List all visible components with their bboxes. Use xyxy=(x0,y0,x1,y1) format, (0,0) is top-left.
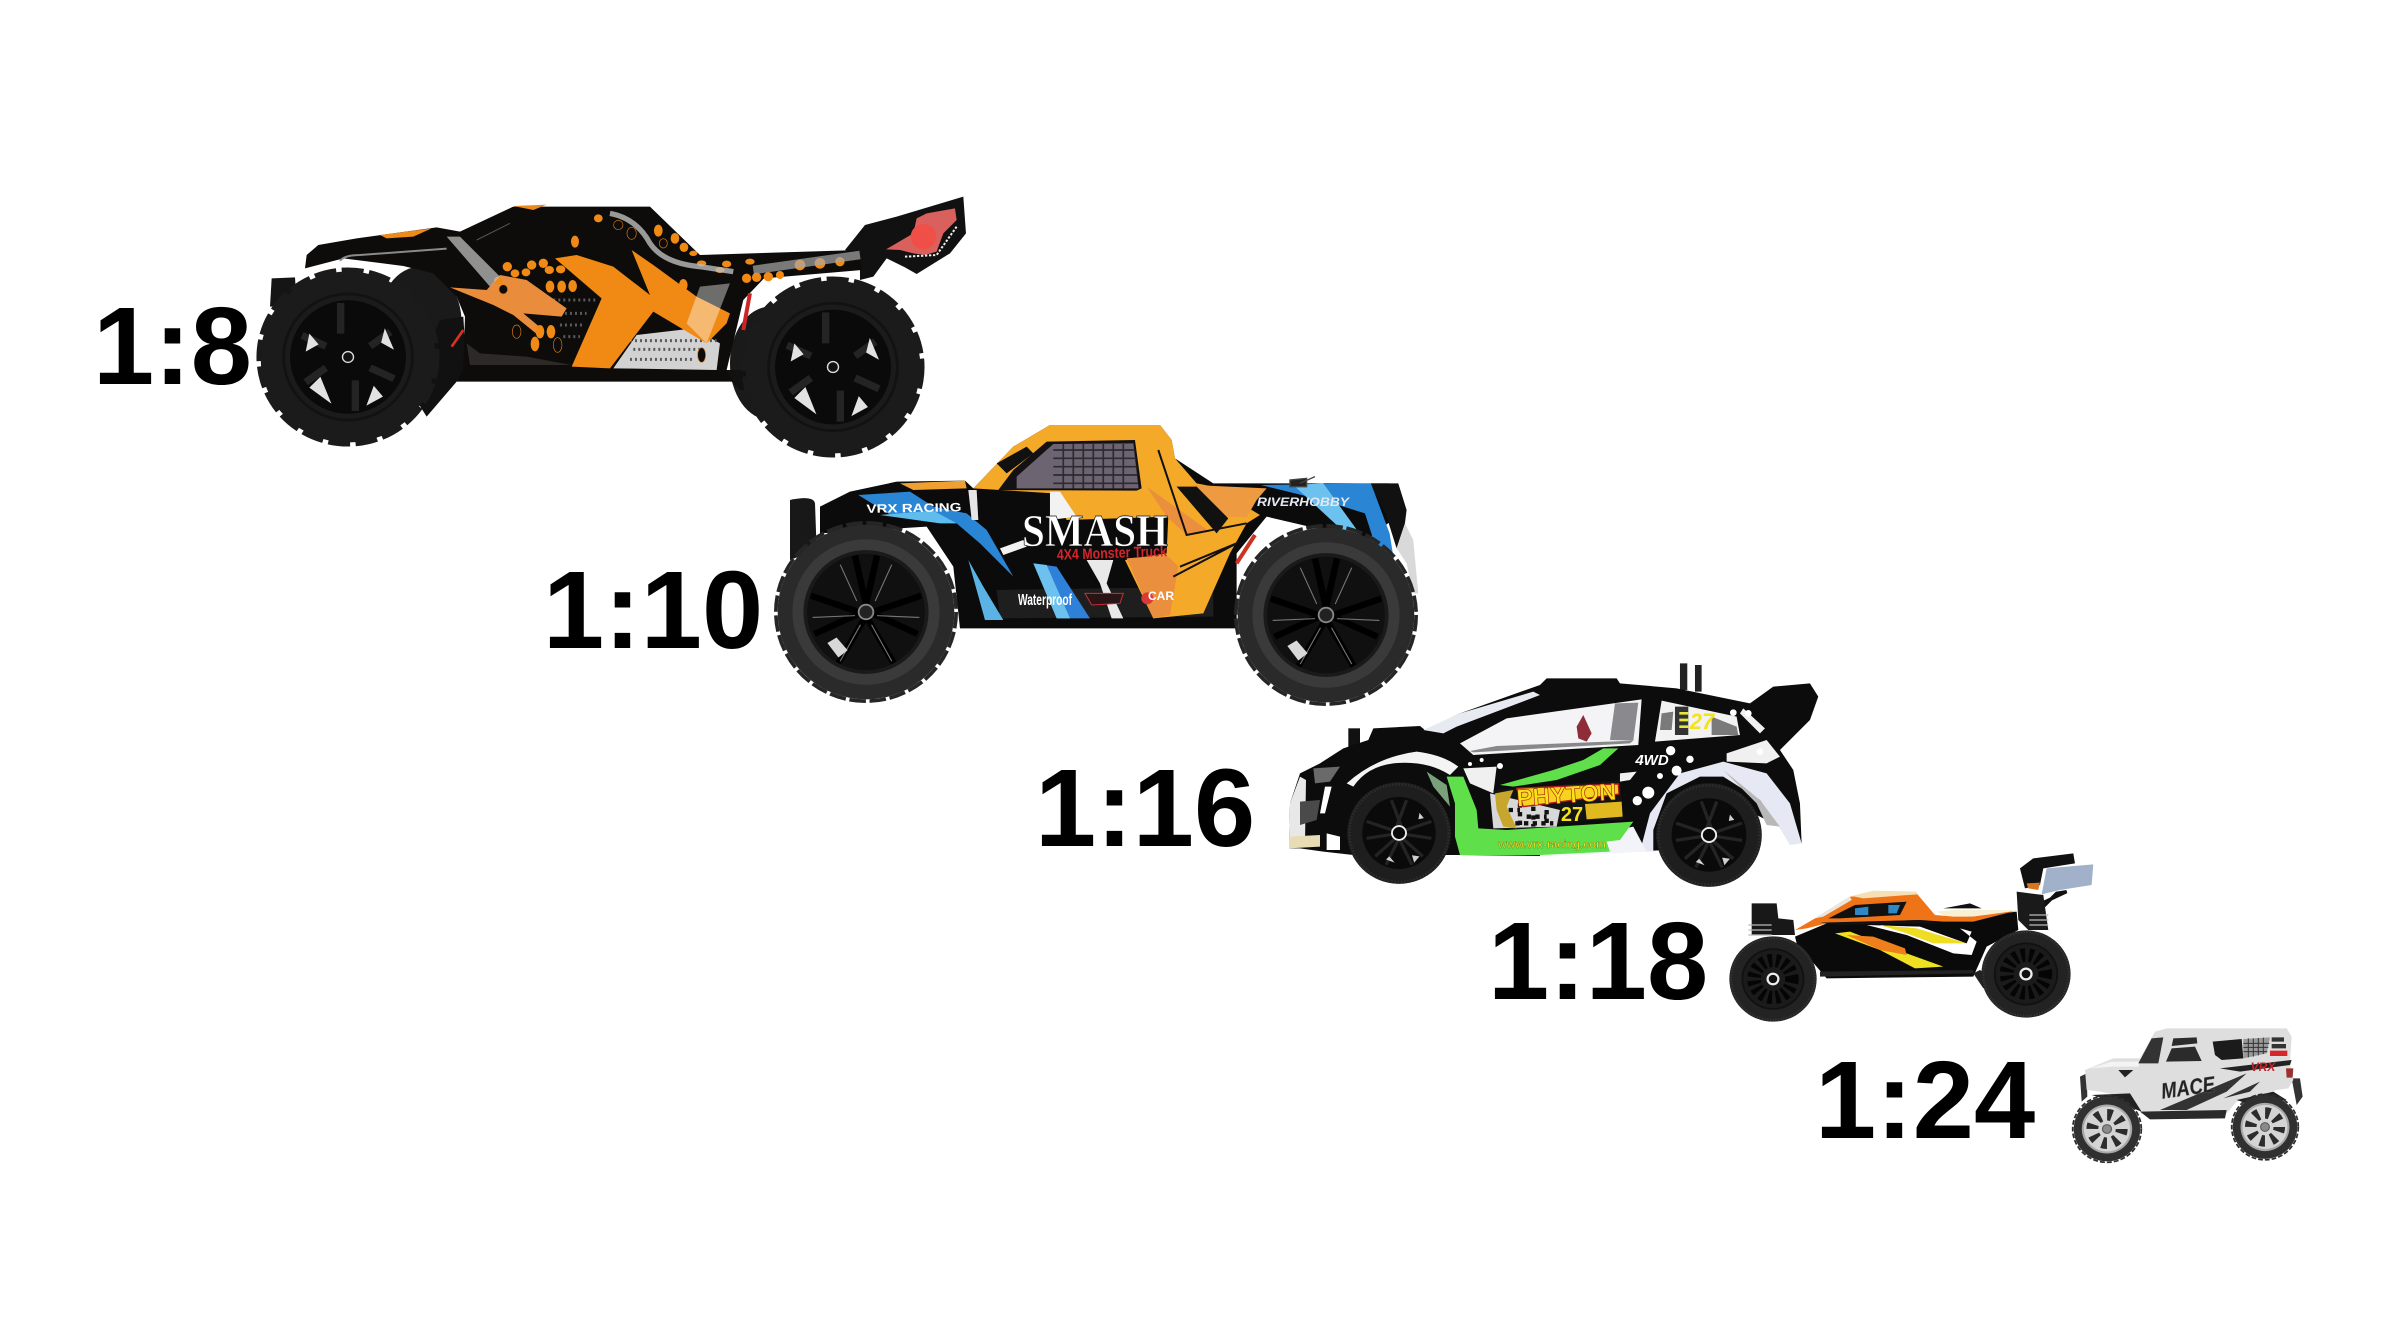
rally car decals: PHYTON xyxy=(1516,779,1617,812)
rally car decals: www.vrx-racing.com xyxy=(1497,839,1606,851)
rear wing with emblem xyxy=(845,197,966,280)
truck decals xyxy=(866,495,1350,609)
wheel: front xyxy=(259,270,437,444)
car: 1:24 MACE white truck xyxy=(2073,1028,2303,1162)
rally car decals xyxy=(1497,709,1716,851)
scale label 1:16: 1:16 xyxy=(1035,747,1255,870)
truck decals: SMASH xyxy=(1022,505,1168,556)
truck decals: VRX xyxy=(2251,1060,2276,1074)
car: 1:18 orange buggy xyxy=(1729,853,2093,1022)
truck decals: VRX RACING xyxy=(866,500,962,516)
rally car decals: 27 xyxy=(1561,804,1583,826)
wheel: rear xyxy=(1981,930,2071,1018)
car: 1:16 PHYTON rally car xyxy=(1289,663,1818,887)
rally car decals: 4WD xyxy=(1634,752,1669,769)
wheel: front xyxy=(776,523,956,701)
car: 1:10 SMASH monster truck xyxy=(776,425,1418,704)
wheel: rear xyxy=(1236,526,1416,704)
wheel: front xyxy=(2073,1096,2141,1162)
wheel: front xyxy=(1729,936,1817,1022)
truck decals: Waterproof xyxy=(1018,592,1072,609)
wheel: rear xyxy=(1656,783,1762,887)
scale label 1:24: 1:24 xyxy=(1815,1039,2035,1162)
truck decals: CAR xyxy=(1148,589,1174,603)
truck decals: RIVERHOBBY xyxy=(1257,495,1350,509)
car: 1:8 orange and black truggy xyxy=(259,197,966,455)
wheel: rear xyxy=(2232,1094,2298,1160)
wheel: front xyxy=(1347,782,1451,884)
wheel: rear xyxy=(744,279,922,455)
scale label 1:8: 1:8 xyxy=(93,285,252,408)
truck decals xyxy=(2159,1060,2276,1104)
rally car decals: 27 xyxy=(1689,709,1716,734)
scale label 1:18: 1:18 xyxy=(1488,900,1708,1023)
truck decals: 4X4 Monster Truck xyxy=(1057,543,1168,564)
truck decals: MACE xyxy=(2159,1071,2218,1104)
scale label 1:10: 1:10 xyxy=(543,549,763,672)
